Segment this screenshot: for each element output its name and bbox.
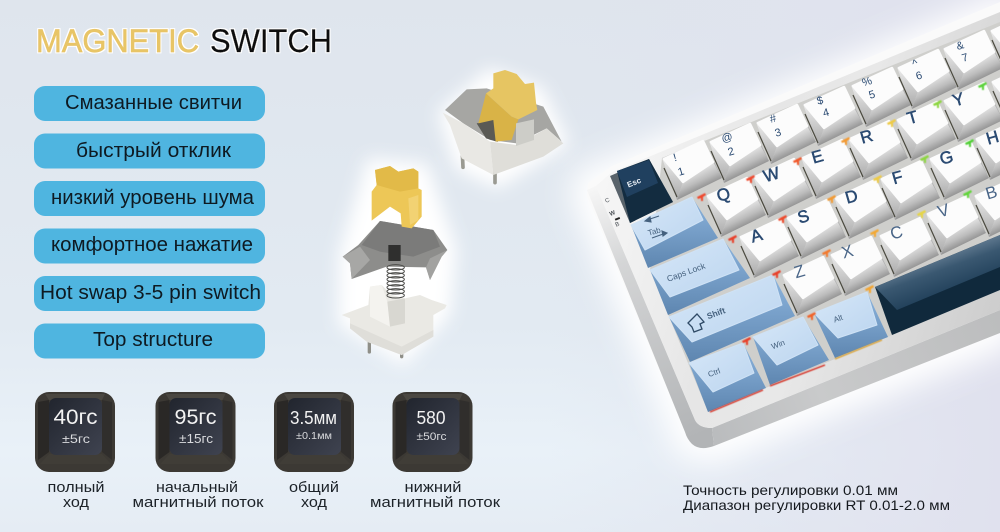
spec: full travel force — [35, 392, 115, 511]
number row keys: $ — [816, 95, 825, 108]
ZXCV row keys: B — [983, 182, 1000, 203]
adjustment accuracy note: Диапазон регулировки RT 0.01-2.0 мм — [683, 497, 950, 513]
white base right face — [490, 128, 563, 175]
pill: low noise — [34, 181, 265, 216]
spec: initial magnetic flux: начальный — [156, 480, 238, 496]
title: MAGNETIC — [36, 23, 199, 59]
number row keys: 6 — [915, 70, 924, 83]
spec: full travel force: ±5гс — [62, 432, 90, 446]
key: Alt — [814, 292, 888, 358]
adjustment accuracy note: Точность регулировки 0.01 мм — [683, 482, 898, 498]
title — [36, 23, 332, 59]
ASDF row keys — [739, 120, 1000, 278]
key: Caps Lock — [650, 239, 750, 315]
spec: full travel force: ход — [63, 495, 90, 511]
key: Ctrl — [689, 343, 766, 412]
number row keys: & — [955, 39, 966, 53]
keyboard glow — [586, 10, 1000, 448]
mode switch labels: B — [615, 222, 621, 229]
spec: total travel — [274, 392, 354, 511]
number row keys: @ — [720, 131, 734, 145]
QWERTY row keys: Q — [715, 184, 732, 206]
key: Tab: Tab — [647, 225, 662, 238]
key well — [650, 22, 1000, 412]
pill: lubricated switches: Смазанные свитчи — [65, 92, 242, 114]
spec: initial magnetic flux: магнитный поток — [132, 495, 264, 511]
pins — [369, 342, 402, 357]
key: Esc: Esc — [626, 176, 643, 190]
number row keys: % — [861, 75, 874, 89]
keyboard white body — [587, 2, 1000, 448]
ZXCV row keys: Z — [792, 261, 807, 282]
key: Esc — [610, 159, 673, 223]
white base — [342, 285, 447, 355]
spec: bottom magnetic flux: 580 — [416, 407, 446, 428]
pill: hot swap — [34, 276, 265, 311]
RGB backlight accents — [697, 82, 987, 412]
adjustment accuracy note — [683, 482, 950, 513]
number row keys: 5 — [868, 89, 877, 102]
key: Alt: Alt — [832, 313, 845, 324]
number row keys: 1 — [677, 166, 686, 179]
pill: top structure: Top structure — [93, 329, 213, 351]
key: Win: Win — [770, 338, 786, 351]
key: Space — [875, 235, 1000, 335]
pill: fast response: быстрый отклик — [76, 140, 231, 162]
feature pills list — [34, 86, 265, 358]
keyboard left frame strip — [587, 186, 714, 448]
key: Win — [753, 317, 829, 385]
number row keys — [662, 12, 1000, 200]
front tower — [516, 119, 534, 146]
pill: low noise: низкий уровень шума — [51, 187, 255, 209]
spec: total travel: ±0.1мм — [296, 430, 332, 442]
spec: total travel: 3.5мм — [290, 408, 337, 428]
glow behind exploded switch — [342, 162, 453, 362]
key: Shift: Shift — [705, 305, 727, 321]
mode switch labels: C — [604, 197, 611, 205]
yellow stem front — [478, 93, 518, 142]
number row keys: ! — [672, 152, 678, 164]
ASDF row keys: D — [843, 186, 860, 208]
keyboard front frame strip — [712, 310, 1000, 446]
yellow stem — [372, 166, 422, 228]
yellow stem top — [486, 70, 537, 119]
QWERTY row keys: W — [761, 163, 782, 186]
number row keys: ^ — [911, 57, 920, 71]
spec: initial magnetic flux: ±15гс — [179, 432, 213, 446]
spec: bottom magnetic flux: нижний — [404, 480, 462, 496]
ZXCV row keys: V — [935, 200, 952, 221]
assembled switch — [442, 70, 565, 185]
spec: bottom magnetic flux: магнитный поток — [370, 495, 501, 511]
gray housing — [343, 221, 447, 280]
spec: full travel force: 40гс — [54, 406, 98, 429]
ASDF row keys: G — [938, 147, 955, 169]
inner spring cavity — [477, 119, 498, 142]
exploded switch — [342, 162, 453, 362]
key: Tab — [631, 197, 718, 268]
ASDF row keys: F — [890, 167, 905, 188]
spec: initial magnetic flux: 95гс — [174, 406, 216, 429]
QWERTY row keys: E — [809, 146, 826, 167]
ZXCV row keys: C — [888, 222, 905, 244]
ZXCV row keys — [782, 177, 1000, 316]
pill: hot swap: Hot swap 3-5 pin switch — [40, 282, 261, 304]
ASDF row keys: S — [795, 206, 812, 227]
mode switch labels: W — [609, 210, 617, 218]
number row keys: # — [769, 112, 779, 126]
spec keycaps — [35, 392, 501, 511]
white base left face — [443, 113, 493, 175]
ASDF row keys: A — [748, 225, 765, 246]
pill: comfortable press: комфортное нажатие — [51, 234, 253, 256]
keyboard plate — [596, 12, 1000, 428]
glow behind assembled switch — [442, 72, 565, 185]
title: SWITCH — [210, 23, 332, 59]
key: Caps Lock: Caps Lock — [665, 260, 707, 284]
QWERTY row keys: T — [905, 107, 920, 128]
spec: bottom magnetic flux: ±50гс — [416, 431, 447, 443]
spec: initial magnetic flux — [132, 392, 264, 511]
key: Shift — [669, 275, 795, 362]
QWERTY row keys: Y — [950, 89, 967, 110]
keyboard — [586, 2, 1000, 448]
mode switch labels — [604, 197, 621, 229]
number row keys: 4 — [822, 107, 831, 120]
number row keys: 3 — [774, 127, 783, 140]
pill: comfortable press — [34, 228, 265, 264]
spring — [387, 265, 404, 298]
key: Ctrl: Ctrl — [707, 366, 722, 379]
number row keys: 7 — [961, 52, 970, 65]
number row keys: 2 — [727, 146, 736, 159]
ZXCV row keys: X — [839, 241, 856, 262]
spec: full travel force: полный — [48, 480, 104, 496]
pins — [462, 153, 495, 183]
QWERTY row keys: R — [858, 126, 875, 148]
pill: lubricated switches — [34, 86, 265, 121]
QWERTY row keys — [706, 63, 1000, 237]
pill: top structure — [34, 324, 265, 358]
spec: bottom magnetic flux — [370, 392, 501, 511]
pill: fast response — [34, 134, 265, 168]
gray housing — [445, 88, 562, 143]
spec: total travel: ход — [301, 495, 328, 511]
spec: total travel: общий — [289, 480, 339, 496]
